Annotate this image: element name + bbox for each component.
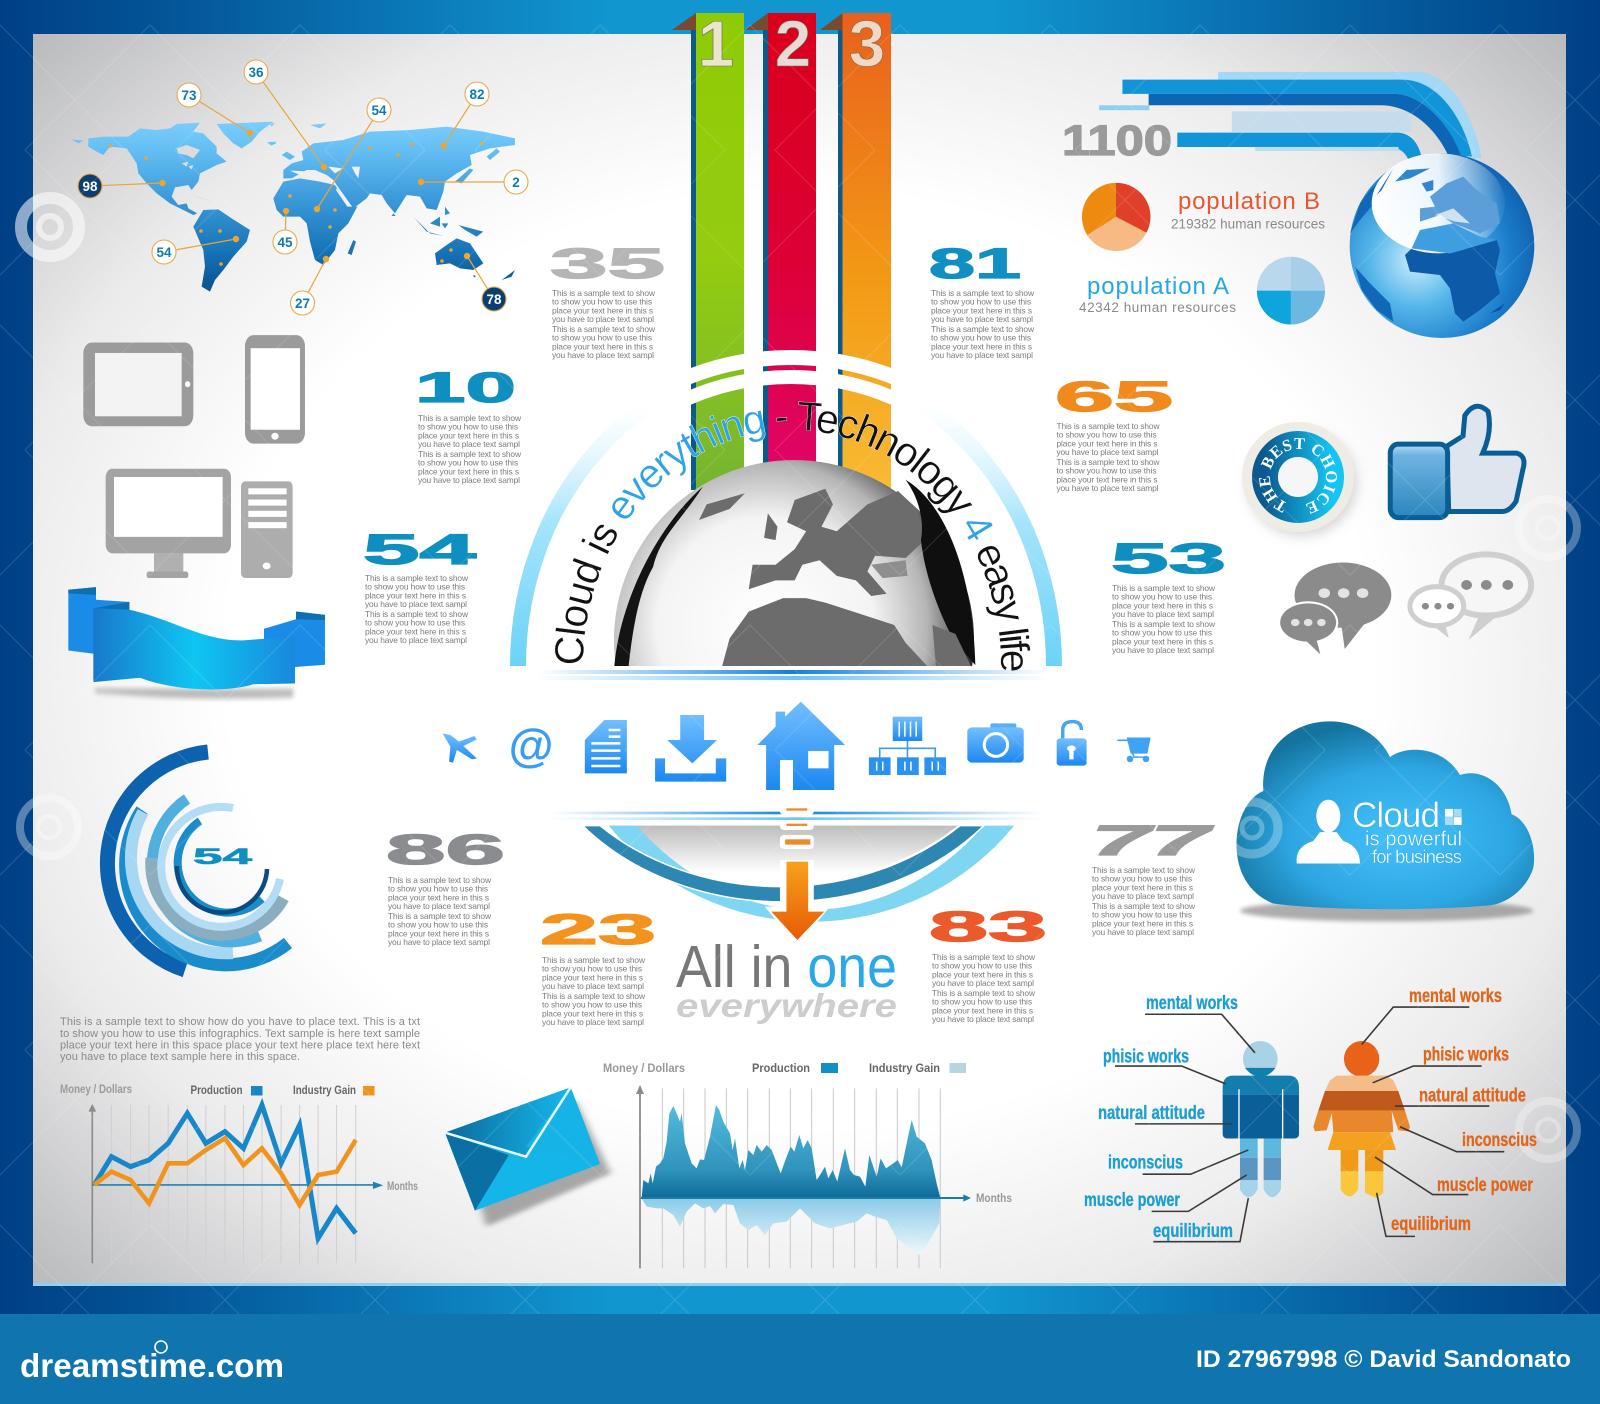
radial donut chart <box>107 752 288 970</box>
icon: at sign: @ <box>509 719 553 771</box>
text block 65: This is a sample text to show <box>1056 421 1160 431</box>
bubble numbers: 45 <box>277 235 293 250</box>
globe land <box>614 480 975 670</box>
arrow <box>765 860 830 947</box>
text block 83: This is a sample text to show <box>932 988 1036 998</box>
text block 81: This is a sample text to show <box>931 288 1035 298</box>
ribbon numerals: 1 <box>698 7 734 80</box>
footer bar <box>0 1314 1600 1404</box>
text block 86: place your text here in this s <box>388 892 489 902</box>
light speech bubbles <box>1410 554 1531 640</box>
text block 65: you have to place text sampl <box>1056 447 1159 457</box>
numbers: big digits: 83 <box>929 903 1047 951</box>
text block 65: you have to place text sampl <box>1056 483 1159 493</box>
text block 77: to show you how to use this <box>1092 910 1192 920</box>
grey globe <box>614 460 976 666</box>
man labels: muscle power <box>1084 1190 1180 1211</box>
text block 10: you have to place text sampl <box>418 475 520 485</box>
text block 65: to show you how to use this <box>1056 466 1156 476</box>
text block 86: to show you how to use this <box>388 884 488 894</box>
upper divider lines <box>538 670 1048 680</box>
area chart labels: Money / Dollars <box>603 1061 685 1075</box>
text block 77: This is a sample text to show <box>1092 901 1196 911</box>
ribbons 1 2 3 <box>670 7 912 503</box>
industry gain area <box>642 1199 940 1255</box>
text block 23 <box>542 955 646 1027</box>
text block 83: to show you how to use this <box>932 997 1032 1007</box>
chart labels <box>60 1082 418 1193</box>
text block 83 <box>932 952 1036 1024</box>
text block 77: place your text here in this s <box>1092 882 1193 892</box>
text block 86: to show you how to use this <box>388 920 488 930</box>
world map <box>72 60 528 315</box>
text block 86: This is a sample text to show <box>388 875 492 885</box>
cloud text: Cloud <box>1352 796 1440 835</box>
population B label: population B <box>1178 188 1320 215</box>
area chart labels: Months <box>976 1191 1012 1205</box>
text block 35: place your text here in this s <box>552 305 653 315</box>
woman callouts <box>1362 1007 1504 1236</box>
population A label: 42342 human resources <box>1079 300 1236 315</box>
bubble numbers: 78 <box>486 292 502 307</box>
text block 10 <box>418 413 522 485</box>
text block 54: This is a sample text to show <box>365 573 469 583</box>
text block 35: place your text here in this s <box>552 341 653 351</box>
numbers: big digits: 77 <box>1091 817 1214 865</box>
paragraph: you have to place text sample here in this space. <box>60 1051 300 1063</box>
text block 10: This is a sample text to show <box>418 449 522 459</box>
numbers: big digits: 23 <box>540 906 656 954</box>
text block 65: This is a sample text to show <box>1056 457 1160 467</box>
capsules <box>780 805 814 849</box>
population A label <box>1079 273 1236 315</box>
icon: lock <box>1057 722 1087 766</box>
icon: house <box>757 702 845 790</box>
lakes and bays <box>177 145 200 169</box>
text block 81: to show you how to use this <box>931 297 1031 307</box>
bubble numbers: 82 <box>469 87 485 102</box>
bubble numbers: 36 <box>248 65 264 80</box>
map dots <box>108 130 484 266</box>
paragraph: place your text here in this space place your text here place text here text <box>60 1040 420 1052</box>
text block 23: place your text here in this s <box>542 1008 643 1018</box>
pie chart B <box>1082 183 1150 251</box>
text block 54: to show you how to use this <box>365 582 465 592</box>
chart labels: Production <box>190 1083 242 1097</box>
text block 54: to show you how to use this <box>365 618 465 628</box>
production area <box>642 1105 940 1198</box>
woman labels: mental works <box>1409 986 1502 1007</box>
numbers: big digits: 10 <box>415 364 516 412</box>
arc cut stripes <box>670 358 912 385</box>
footer logo: dreamstime.com <box>20 1347 284 1384</box>
text block 77: This is a sample text to show <box>1092 865 1196 875</box>
red ribbon <box>768 13 816 503</box>
americas <box>72 122 277 292</box>
text block 65: to show you how to use this <box>1056 430 1156 440</box>
text block 54: This is a sample text to show <box>365 609 469 619</box>
text block 10: place your text here in this s <box>418 466 519 476</box>
text block 23: you have to place text sampl <box>542 1017 644 1027</box>
population A label: population A <box>1087 273 1229 300</box>
man labels: inconscius <box>1108 1152 1183 1174</box>
line chart <box>60 1082 418 1263</box>
cloud text: for business <box>1372 846 1462 867</box>
chart labels: Money / Dollars <box>60 1082 132 1096</box>
All in one heading: All in one <box>676 934 897 1000</box>
numbers: big digits: 86 <box>386 826 505 874</box>
best choice badge: THE BEST CHOICE <box>1259 438 1337 514</box>
phone <box>245 335 305 444</box>
text block 83: you have to place text sampl <box>932 1014 1034 1024</box>
production series <box>94 1105 356 1238</box>
icon: cart <box>1117 737 1151 762</box>
text block 77 <box>1092 865 1196 937</box>
text block 35: you have to place text sampl <box>552 314 654 324</box>
population B label: 219382 human resources <box>1171 216 1325 232</box>
africa, eurasia, oceania <box>270 123 515 280</box>
dark speech bubbles <box>1278 562 1391 654</box>
bubble numbers: 98 <box>82 179 98 194</box>
dark blue arc <box>583 826 984 902</box>
ribbon numerals <box>698 7 885 80</box>
text block 86: you have to place text sampl <box>388 901 490 911</box>
bubble numbers: 73 <box>181 88 197 103</box>
text block 81: This is a sample text to show <box>931 324 1035 334</box>
ribbon numerals: 3 <box>849 7 885 80</box>
text block 81: you have to place text sampl <box>931 314 1033 324</box>
thumbs up <box>1390 406 1524 518</box>
numbers: big digits: 1100 <box>1062 117 1172 165</box>
numbers: big digits: 53 <box>1111 535 1226 583</box>
icon: camera <box>967 723 1024 763</box>
text block 10: you have to place text sampl <box>418 439 520 449</box>
text block 35 <box>552 288 656 360</box>
text block 10: place your text here in this s <box>418 430 519 440</box>
text block 65 <box>1056 421 1160 493</box>
paragraph <box>60 1016 420 1063</box>
paragraph: to show you how to use this infographics. Text sample is here text sample <box>60 1028 420 1040</box>
pie chart A <box>1257 257 1325 325</box>
man labels: equilibrium <box>1153 1221 1233 1242</box>
man labels <box>1084 993 1238 1242</box>
text block 53: place your text here in this s <box>1112 636 1213 646</box>
text block 53 <box>1112 583 1216 655</box>
inland seas <box>290 167 360 207</box>
numbers: big digits: 65 <box>1055 373 1173 421</box>
text block 54 <box>365 573 469 645</box>
bubble numbers <box>82 65 520 311</box>
everywhere tagline: everywhere <box>676 987 897 1024</box>
envelope <box>445 1087 611 1227</box>
chart labels: Months <box>387 1179 418 1193</box>
text block 54: you have to place text sampl <box>365 635 467 645</box>
numbers: big digits: 81 <box>929 240 1021 288</box>
area chart labels: Industry Gain <box>869 1061 940 1075</box>
blue globe <box>1350 153 1534 338</box>
tower <box>241 481 293 578</box>
icon row <box>443 702 1087 790</box>
text block 53: to show you how to use this <box>1112 592 1212 602</box>
text block 10: to show you how to use this <box>418 458 518 468</box>
text block 35: to show you how to use this <box>552 333 652 343</box>
text block 77: you have to place text sampl <box>1092 927 1194 937</box>
text block 65: place your text here in this s <box>1056 438 1158 448</box>
leader lines <box>90 72 516 303</box>
text block 54: you have to place text sampl <box>365 599 467 609</box>
text block 54: place your text here in this s <box>365 626 466 636</box>
cloud watermark <box>1226 802 1278 854</box>
text block 23: to show you how to use this <box>542 1000 642 1010</box>
text block 65: place your text here in this s <box>1056 474 1158 484</box>
text block 54: place your text here in this s <box>365 590 466 600</box>
footer credit: ID 27967998 © David Sandonato <box>1196 1346 1571 1373</box>
text block 81 <box>931 288 1035 360</box>
text block 53: to show you how to use this <box>1112 628 1212 638</box>
ribbon edges <box>691 30 842 490</box>
text block 53: This is a sample text to show <box>1112 619 1216 629</box>
lower divider lines <box>550 812 1045 820</box>
man labels: phisic works <box>1103 1046 1189 1068</box>
text block 77: place your text here in this s <box>1092 918 1193 928</box>
man callouts <box>1115 1014 1255 1242</box>
semicircle ring <box>518 362 1054 666</box>
arc title text: Cloud is everything - Technology 4 easy life <box>554 402 1030 671</box>
population B label <box>1171 188 1325 232</box>
text block 81: place your text here in this s <box>931 305 1032 315</box>
tablet <box>83 343 193 426</box>
text block 81: to show you how to use this <box>931 333 1031 343</box>
icon: document <box>585 720 627 773</box>
man figure <box>1084 993 1299 1242</box>
text block 86 <box>388 875 492 947</box>
woman labels: equilibrium <box>1391 1214 1471 1235</box>
text block 23: This is a sample text to show <box>542 991 646 1001</box>
text block 81: place your text here in this s <box>931 341 1032 351</box>
cloud text <box>1352 796 1462 867</box>
text block 77: you have to place text sampl <box>1092 891 1194 901</box>
text block 53: you have to place text sampl <box>1112 609 1214 619</box>
woman labels: muscle power <box>1437 1175 1533 1196</box>
swoosh bands <box>1099 72 1482 160</box>
text block 86: This is a sample text to show <box>388 911 492 921</box>
numbers: big digits: 35 <box>550 240 665 288</box>
text block 81: you have to place text sampl <box>931 350 1033 360</box>
bubble numbers: 27 <box>295 296 310 311</box>
blue ribbon banner <box>68 587 325 699</box>
man labels: mental works <box>1146 993 1238 1014</box>
woman labels: phisic works <box>1423 1044 1509 1066</box>
tiles <box>1445 809 1462 825</box>
text block 86: place your text here in this s <box>388 928 489 938</box>
icon: airplane <box>443 733 477 763</box>
donut value: 54 <box>193 844 254 869</box>
bubble numbers: 54 <box>156 245 172 260</box>
watermark spirals <box>20 198 1577 1159</box>
ribbon numerals: 2 <box>775 7 811 80</box>
text block 35: to show you how to use this <box>552 297 652 307</box>
globe highlight <box>1372 153 1505 253</box>
text block 35: you have to place text sampl <box>552 350 654 360</box>
text block 35: This is a sample text to show <box>552 288 656 298</box>
green ribbon <box>696 13 744 503</box>
icon: network <box>869 717 946 775</box>
text block 53: place your text here in this s <box>1112 600 1213 610</box>
woman labels: natural attitude <box>1419 1086 1526 1106</box>
light blue arc <box>609 826 1014 922</box>
industry gain series <box>94 1138 356 1205</box>
monitor <box>106 469 231 578</box>
area chart labels <box>603 1061 1012 1205</box>
paragraph: This is a sample text to show how do you have to place text. This is a txt <box>60 1016 420 1028</box>
globe land <box>1350 168 1505 322</box>
chart labels: Industry Gain <box>293 1083 356 1097</box>
ribbon fold tabs <box>672 13 842 30</box>
highlighted land <box>1377 168 1500 253</box>
text block 10: to show you how to use this <box>418 422 518 432</box>
text block 83: to show you how to use this <box>932 961 1032 971</box>
text block 86: you have to place text sampl <box>388 937 490 947</box>
text block 23: This is a sample text to show <box>542 955 646 965</box>
text block 83: place your text here in this s <box>932 1005 1033 1015</box>
text block 53: you have to place text sampl <box>1112 645 1214 655</box>
text block 53: This is a sample text to show <box>1112 583 1216 593</box>
text block 83: place your text here in this s <box>932 969 1033 979</box>
text block 77: to show you how to use this <box>1092 874 1192 884</box>
area chart <box>603 1061 1012 1268</box>
bowl shadow <box>611 826 958 884</box>
cloud text: is powerful <box>1365 828 1462 850</box>
text block 83: This is a sample text to show <box>932 952 1036 962</box>
bubble numbers: 2 <box>512 175 520 190</box>
cloud <box>1226 721 1534 921</box>
orange ribbon <box>842 13 891 503</box>
woman figure <box>1313 986 1537 1236</box>
best choice badge <box>1242 422 1362 540</box>
numbers: big digits: 54 <box>363 526 476 574</box>
woman labels <box>1391 986 1537 1235</box>
text block 23: to show you how to use this <box>542 964 642 974</box>
area chart labels: Production <box>752 1061 810 1075</box>
text block 23: place your text here in this s <box>542 972 643 982</box>
text block 83: you have to place text sampl <box>932 978 1034 988</box>
number bubbles <box>78 60 528 315</box>
person icon <box>1297 800 1360 864</box>
text block 35: This is a sample text to show <box>552 324 656 334</box>
icon: download <box>655 715 726 782</box>
bowl and arrow <box>550 805 1045 947</box>
woman labels: inconscius <box>1462 1130 1537 1151</box>
devices <box>68 335 325 699</box>
text block 10: This is a sample text to show <box>418 413 522 423</box>
text block 23: you have to place text sampl <box>542 981 644 991</box>
numbers: big digits <box>363 117 1226 954</box>
bubble numbers: 54 <box>371 103 387 118</box>
man labels: natural attitude <box>1098 1103 1205 1124</box>
